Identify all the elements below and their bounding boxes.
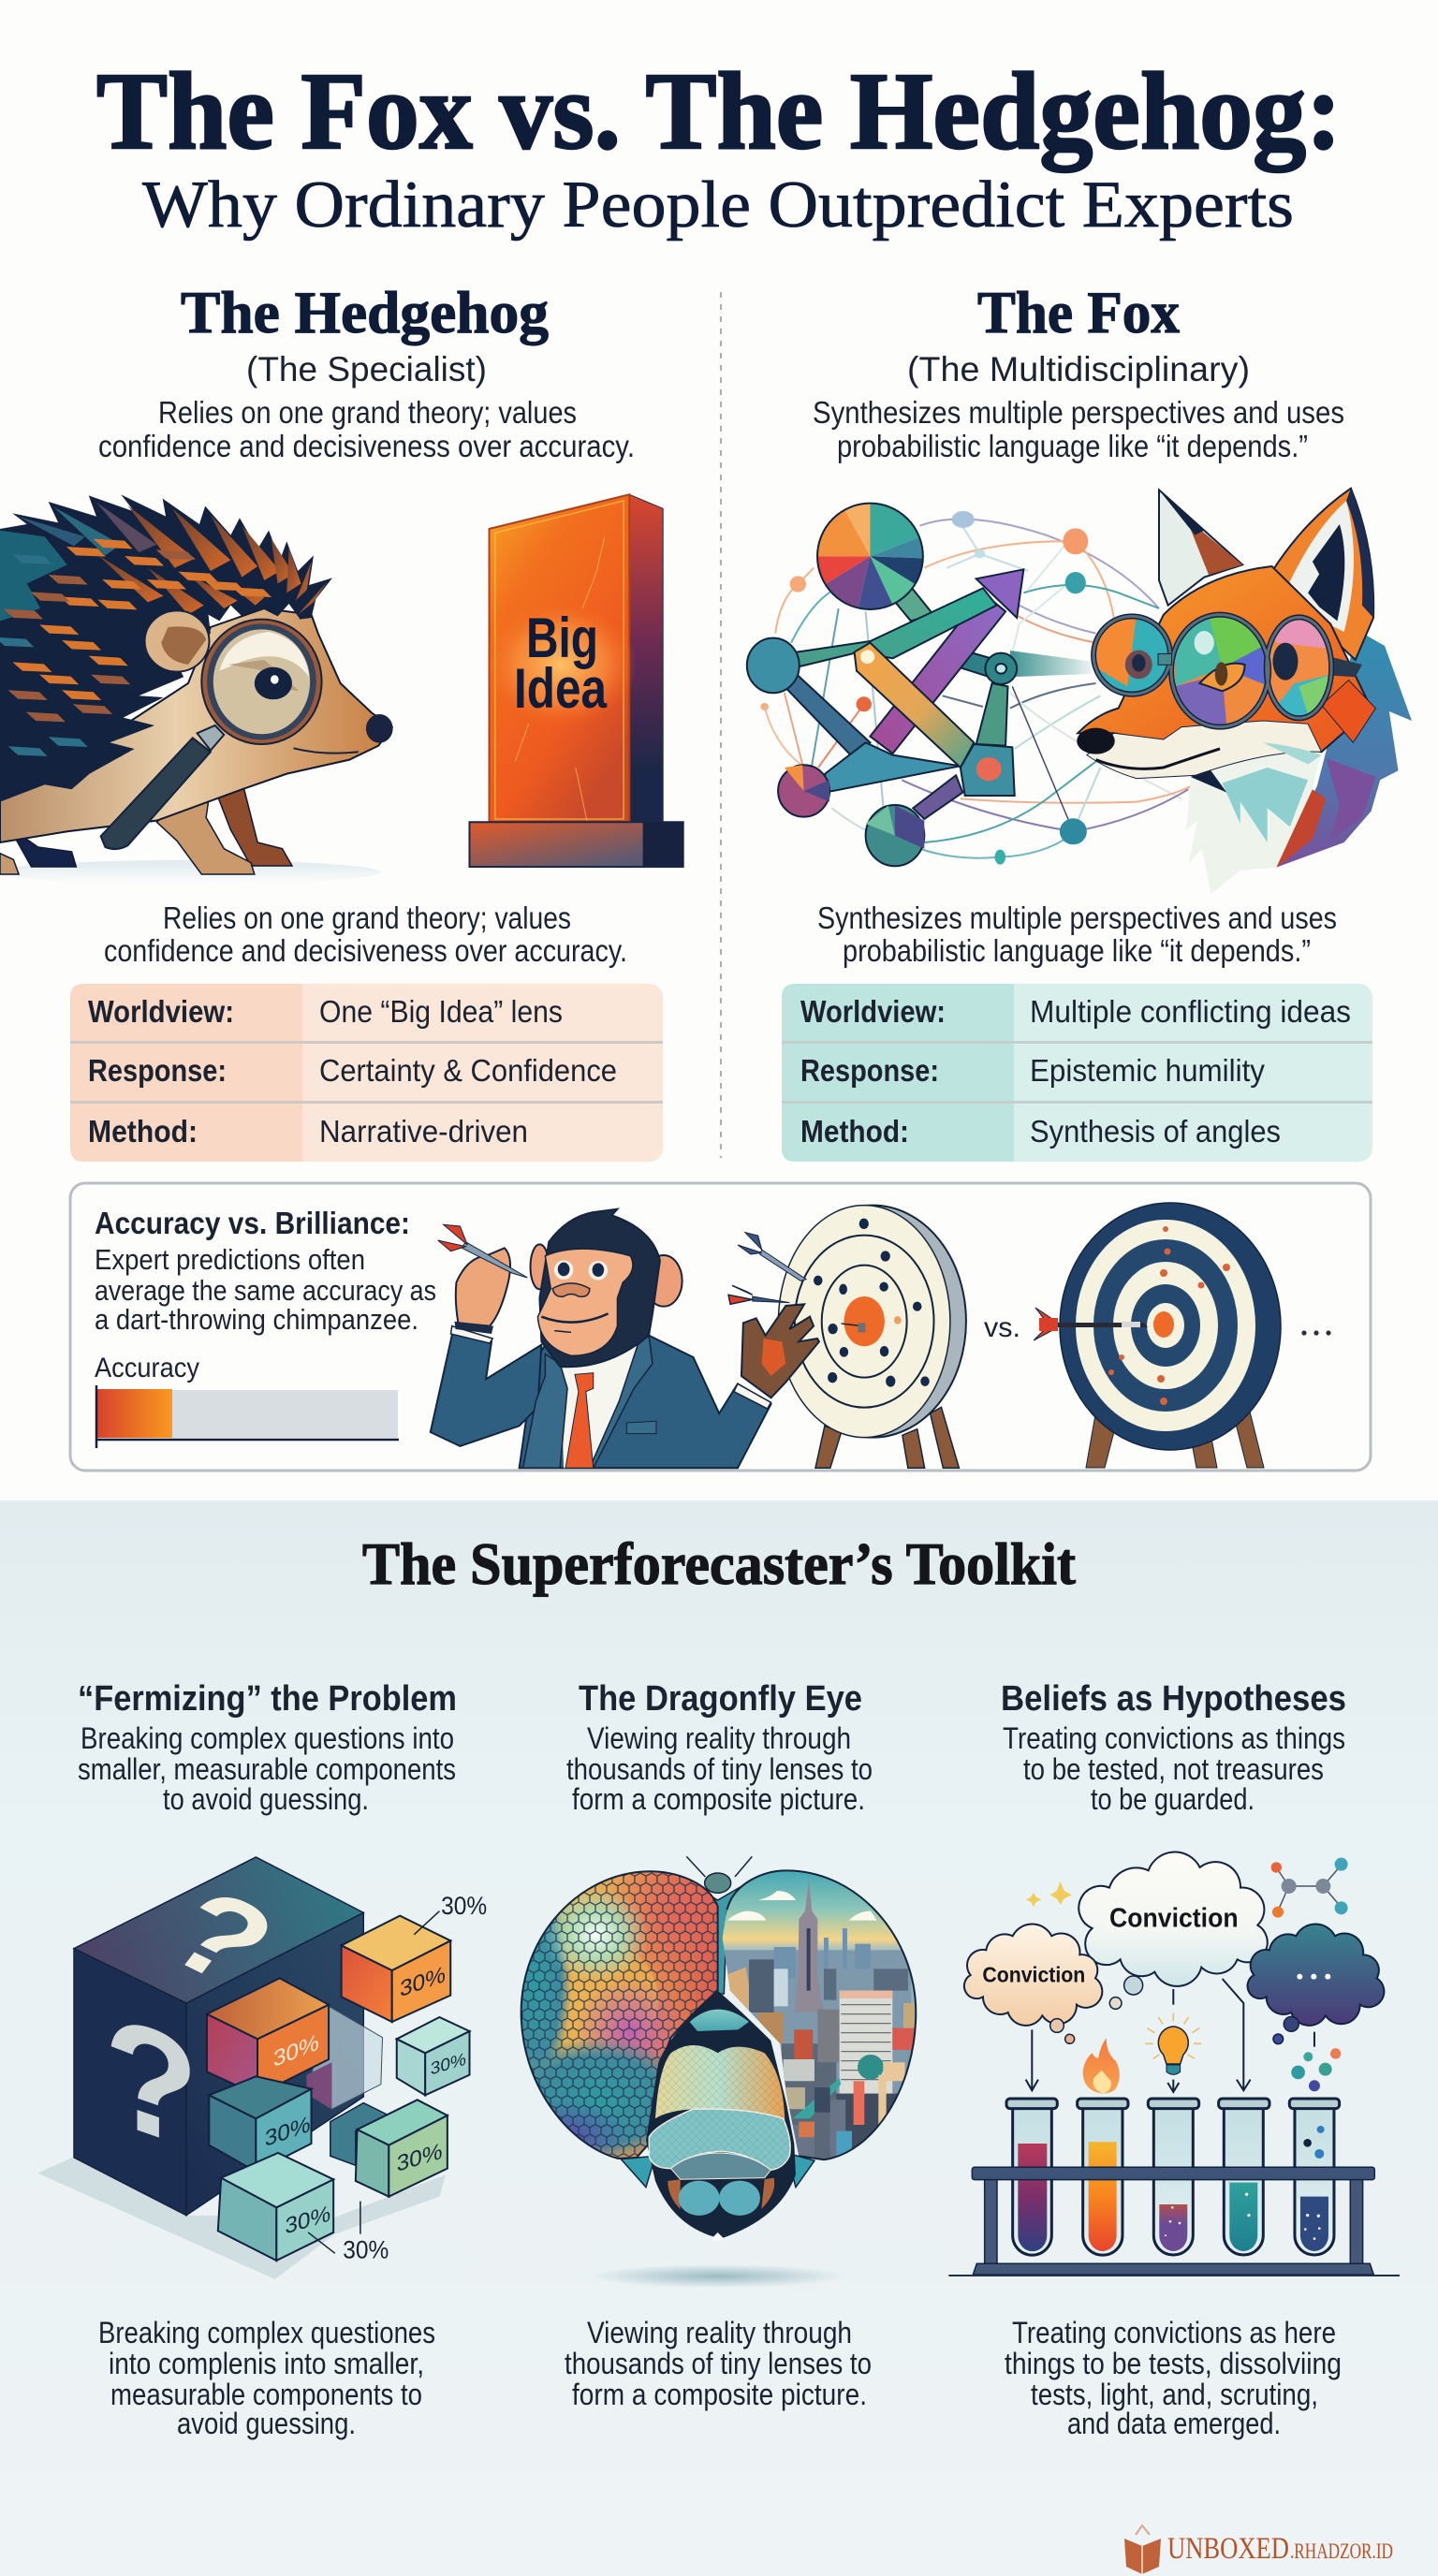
text: hedgehog summary: Relies on one grand theory; values [158, 395, 577, 430]
rack back posts [985, 2178, 1363, 2263]
orange cube [207, 1978, 329, 2095]
heading: the hedgehog: The Hedgehog [181, 279, 549, 345]
text: fermizing repeat: measurable components to [110, 2378, 422, 2411]
panel: fox traits table: Multiple conflicting ideas [1030, 994, 1351, 1029]
illustration: accurate bullseye target [1034, 1203, 1281, 1468]
panel: fox traits table [782, 984, 1372, 1162]
text: dragonfly repeat: Viewing reality through [587, 2316, 852, 2349]
panel: fox traits table: Synthesis of angles [1030, 1114, 1281, 1149]
molecule [1271, 1858, 1348, 1918]
text: hedgehog summary: confidence and decisiveness over accuracy. [98, 429, 635, 463]
rack top bar and base [948, 2167, 1400, 2276]
dart in bullseye [1034, 1308, 1148, 1340]
column: fermizing heading and text: “Fermizing” the Problem [78, 1679, 457, 1719]
panel: fox traits table: Method: [800, 1114, 909, 1149]
text: beliefs repeat [1005, 2316, 1342, 2440]
column: beliefs as hypotheses heading and text: Treating convictions as things [1003, 1721, 1345, 1755]
column: fermizing heading and text: to avoid guessing. [163, 1782, 369, 1816]
illustration: fox with glasses [1077, 489, 1412, 894]
title: The Fox vs. The Hedgehog: [96, 50, 1342, 172]
text: fermizing repeat: avoid guessing. [177, 2407, 356, 2440]
column: dragonfly eye heading and text: thousands of tiny lenses to [566, 1752, 873, 1786]
illustration: convictions and test tubes [948, 1852, 1400, 2276]
column: beliefs as hypotheses heading and text [1001, 1679, 1346, 1816]
logo: unboxed.rhadzor.id: UNBOXED [1167, 2532, 1289, 2566]
thought cloud: dark with dots [1248, 1924, 1384, 2044]
heading: the hedgehog: (The Specialist) [246, 350, 487, 388]
illustration: black box split into estimate cubes [37, 1857, 487, 2279]
text: fox description repeat: probabilistic language like “it depends.” [843, 933, 1311, 968]
percent callouts: 30% [441, 1892, 487, 1920]
column: dragonfly eye heading and text: The Dragonfly Eye [579, 1679, 862, 1719]
thought cloud: large conviction [1078, 1852, 1268, 2009]
text: accuracy vs brilliance: a dart-throwing chimpanzee. [95, 1303, 418, 1336]
yellow cube [342, 1916, 450, 2022]
text: fox summary: Synthesizes multiple perspectives and uses [813, 395, 1344, 430]
large dark cube: ? [104, 1981, 198, 2184]
panel: hedgehog traits table: Method: [88, 1114, 198, 1149]
falling particles [1291, 2048, 1341, 2091]
green cube: 30% [397, 2139, 443, 2177]
text: beliefs repeat: Treating convictions as here [1012, 2316, 1336, 2349]
illustration: scattered target [728, 1206, 966, 1468]
text: hedgehog summary [98, 395, 635, 463]
bubbles in tubes [1165, 2126, 1325, 2240]
illustration: chimpanzee in suit [431, 1209, 771, 1468]
thought cloud: small conviction [964, 1924, 1102, 2043]
panel: fox traits table: Worldview: [800, 994, 946, 1029]
background: upper section [0, 0, 1438, 1500]
column: beliefs as hypotheses heading and text: to be tested, not treasures [1023, 1752, 1324, 1786]
column: dragonfly eye heading and text: Viewing reality through [587, 1721, 851, 1755]
background: toolkit section [0, 1500, 1438, 2576]
magnifying glass [101, 620, 322, 849]
chart: accuracy bar [95, 1353, 399, 1448]
text: vs: vs. [984, 1312, 1020, 1343]
text: fox description repeat: Synthesizes multiple perspectives and uses [817, 900, 1337, 935]
fox left ear [1159, 490, 1242, 606]
light cube bottom [218, 2153, 333, 2261]
column: dragonfly eye heading and text: form a composite picture. [572, 1782, 865, 1816]
text: dragonfly repeat [565, 2316, 872, 2411]
panel: hedgehog traits table [70, 984, 663, 1162]
network curves [765, 519, 1191, 858]
panel: fox traits table: Epistemic humility [1030, 1053, 1265, 1088]
large dark cube [74, 1857, 363, 2216]
divider between columns [720, 292, 722, 1158]
illustration: hedgehog with magnifying glass [0, 494, 393, 884]
city reflected in right eye [721, 1869, 917, 2162]
illustration: network diagram [747, 499, 1191, 866]
text: hedgehog description repeat [104, 900, 627, 968]
text: dragonfly repeat: form a composite picture. [572, 2378, 867, 2411]
teal cube [209, 2076, 312, 2172]
test tubes [1006, 2099, 1340, 2255]
column: dragonfly eye heading and text [566, 1679, 873, 1816]
panel: hedgehog traits table: Worldview: [88, 994, 234, 1029]
logo: unboxed.rhadzor.id [1124, 2525, 1393, 2574]
heading: the fox: The Fox [977, 279, 1180, 345]
text: big idea label: Idea [514, 657, 608, 720]
panel: accuracy vs brilliance [70, 1183, 1371, 1471]
heading: the fox: (The Multidisciplinary) [907, 350, 1250, 388]
panel: fox traits table: Response: [800, 1053, 939, 1088]
column: beliefs as hypotheses heading and text: Beliefs as Hypotheses [1001, 1679, 1346, 1719]
connector bars [775, 569, 1023, 819]
text: beliefs repeat: tests, light, and, scruting, [1031, 2378, 1318, 2411]
heading: the fox [907, 279, 1250, 388]
fox muzzle [1087, 721, 1322, 779]
logo: unboxed.rhadzor.id: .RHADZOR.ID [1290, 2539, 1393, 2563]
heading: superforecaster's toolkit: The Superforecaster’s Toolkit [362, 1530, 1077, 1597]
head [531, 1209, 682, 1367]
lightbulb [1145, 2013, 1201, 2074]
column: fermizing heading and text: Breaking complex questions into [81, 1721, 454, 1755]
subtitle: Why Ordinary People Outpredict Experts [142, 168, 1294, 242]
arrows from clouds [1026, 1979, 1314, 2092]
right gloved hand [741, 1304, 819, 1398]
light cube bottom: 30% [285, 2202, 330, 2239]
left hand holding dart [438, 1224, 527, 1334]
text: beliefs repeat: things to be tests, dissolviing [1005, 2347, 1342, 2380]
glass cubes behind [306, 2006, 383, 2109]
text: accuracy vs brilliance: Accuracy vs. Brilliance: [95, 1206, 410, 1240]
pie wheel [816, 502, 924, 610]
fox head [1078, 566, 1372, 752]
ear [145, 610, 209, 672]
small nodes [760, 511, 1088, 865]
teal back of quills [0, 531, 67, 621]
text: accuracy vs brilliance: average the same accuracy as [95, 1274, 436, 1307]
chart: accuracy bar: Accuracy [95, 1353, 199, 1383]
thought cloud: large conviction: Conviction [1109, 1903, 1239, 1933]
yellow cube: 30% [400, 1961, 446, 2002]
text: fermizing repeat [98, 2316, 435, 2440]
flame [1083, 2038, 1120, 2094]
text: beliefs repeat: and data emerged. [1067, 2407, 1281, 2440]
text: dragonfly repeat: thousands of tiny lenses to [565, 2347, 872, 2380]
text: ellipsis [1301, 1330, 1331, 1336]
text: accuracy vs brilliance [95, 1206, 436, 1336]
percent callouts: 30% [343, 2235, 389, 2263]
text: fox description repeat [817, 900, 1337, 968]
text: hedgehog description repeat: Relies on one grand theory; values [163, 900, 571, 935]
darts stuck in target [728, 1233, 806, 1304]
column: beliefs as hypotheses heading and text: to be guarded. [1091, 1782, 1255, 1816]
green cube [356, 2100, 448, 2197]
fox right ear [1263, 489, 1373, 660]
text: fox summary [813, 395, 1344, 463]
illustration: dragonfly head [503, 1844, 917, 2288]
light cube right [397, 2017, 470, 2095]
text: accuracy vs brilliance: Expert predictions often [95, 1243, 365, 1276]
fox chest fur [1186, 749, 1322, 894]
column: fermizing heading and text [78, 1679, 457, 1816]
text: fox summary: probabilistic language like “it depends.” [837, 429, 1308, 463]
suit [520, 1336, 771, 1468]
panel: hedgehog traits table: Certainty & Confidence [319, 1053, 617, 1088]
column: fermizing heading and text: smaller, measurable components [78, 1752, 456, 1786]
fox back fur [1276, 630, 1412, 868]
text: big idea label [514, 607, 608, 720]
orange cube: 30% [273, 2029, 319, 2072]
text: hedgehog description repeat: confidence and decisiveness over accuracy. [104, 933, 627, 968]
percent callouts [308, 1892, 487, 2263]
panel: hedgehog traits table: One “Big Idea” lens [319, 994, 563, 1029]
text: big idea label: Big [526, 607, 598, 669]
panel: hedgehog traits table: Response: [88, 1053, 227, 1088]
panel: hedgehog traits table: Narrative-driven [319, 1114, 528, 1149]
light cube right: 30% [431, 2050, 466, 2080]
text: fermizing repeat: into complenis into smaller, [109, 2347, 424, 2380]
text: fermizing repeat: Breaking complex questiones [98, 2316, 435, 2349]
wheel nodes [747, 638, 1017, 866]
fox glasses [1092, 615, 1362, 727]
teal cube: 30% [265, 2111, 311, 2152]
illustration: big idea monolith [469, 494, 683, 867]
large dark cube: ? [142, 1866, 300, 2010]
heading: the hedgehog [181, 279, 549, 388]
dragonfly face [646, 1991, 796, 2241]
compound eye lens [521, 1870, 719, 2159]
sparkle stars [1026, 1881, 1072, 1907]
thought cloud: small conviction: Conviction [982, 1962, 1085, 1986]
